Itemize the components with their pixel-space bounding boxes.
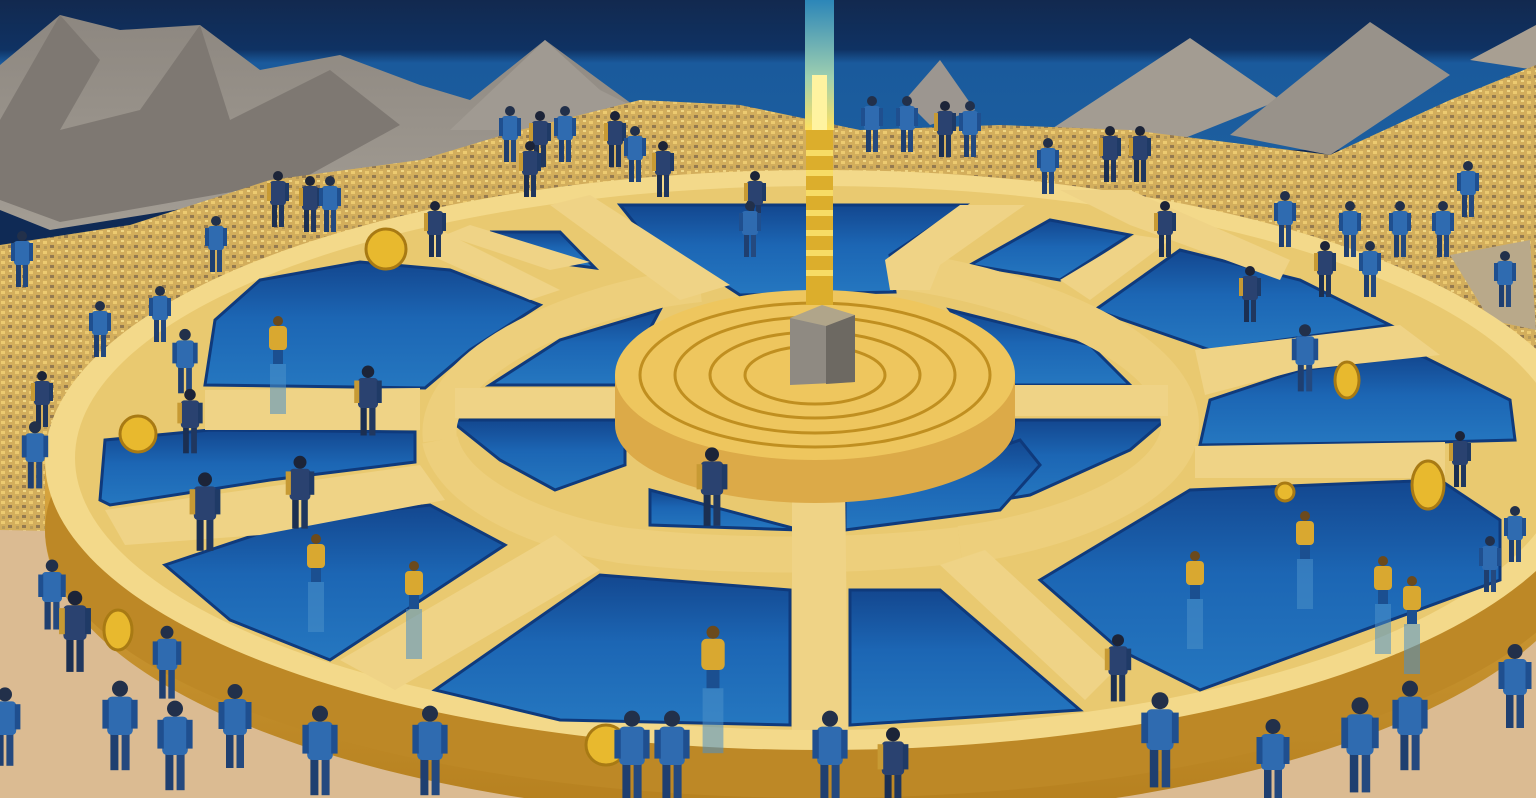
spokes	[105, 190, 1445, 730]
water cells	[100, 205, 1515, 725]
workers: bottom and centre	[614, 447, 1532, 798]
golden ladder and light beam	[805, 0, 834, 305]
mountains	[0, 15, 1536, 230]
gold coins	[104, 229, 1444, 765]
central pillar	[790, 305, 855, 385]
wheel outer platform	[45, 170, 1536, 798]
workers: right side	[1239, 266, 1526, 592]
inner ring	[439, 270, 1180, 554]
sky and sea	[0, 0, 1536, 150]
workers: upper terrain	[11, 96, 1516, 307]
central disc	[615, 290, 1015, 503]
workers: left side	[0, 286, 448, 795]
